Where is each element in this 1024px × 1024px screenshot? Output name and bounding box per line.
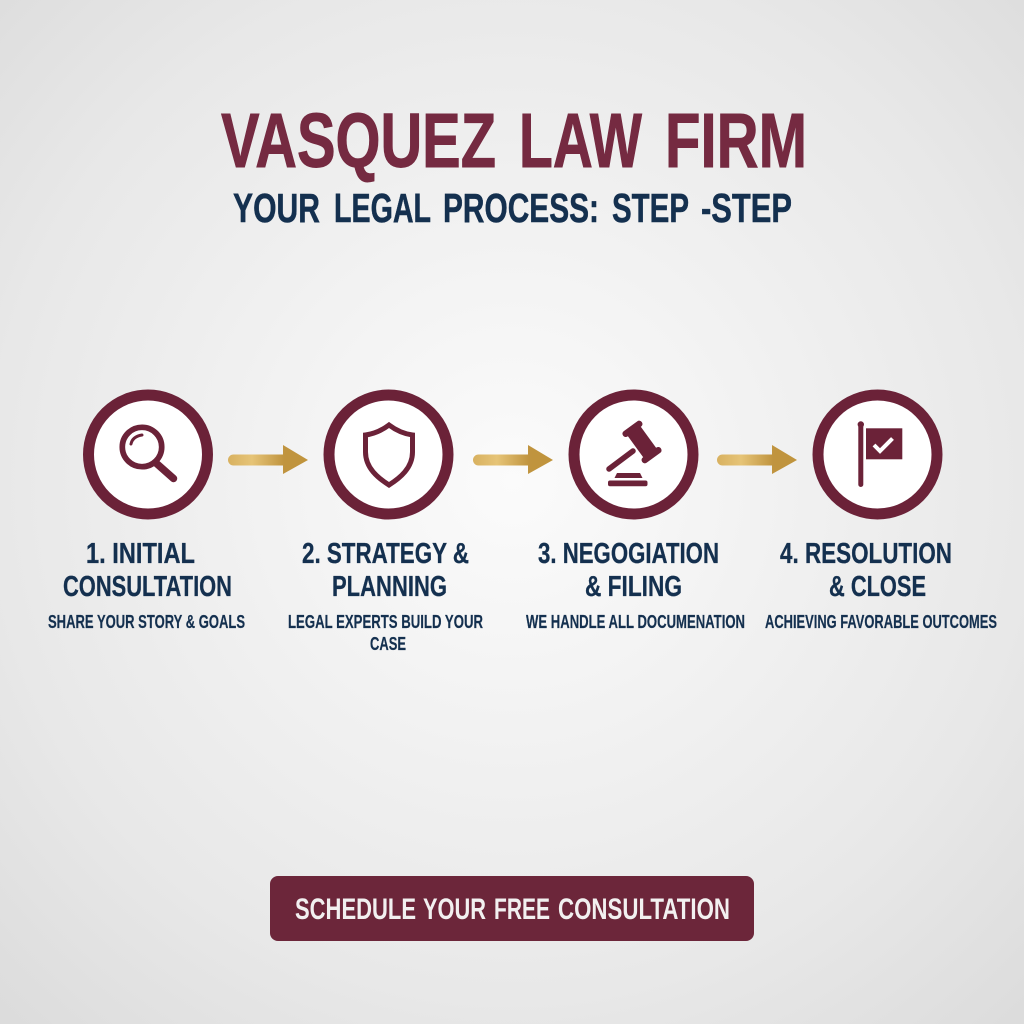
step 4 heading: [780, 538, 952, 603]
step 4 heading: 4. RESOLUTION: [780, 538, 952, 570]
subtitle: YOUR: [233, 185, 320, 231]
icon: gavel in ring: [574, 395, 693, 514]
step 1 heading: CONSULTATION: [63, 571, 232, 603]
step 2 description: LEGAL EXPERTS BUILD YOUR: [288, 611, 483, 632]
arrow 2 to 3: [473, 445, 553, 474]
icon: flag with check in ring: [818, 395, 937, 514]
subtitle: -STEP: [701, 185, 792, 231]
step 1 heading: [63, 538, 232, 603]
step 4: resolution and close: [765, 395, 997, 632]
title: LAW: [519, 98, 642, 184]
step 2 description: CASE: [370, 633, 406, 654]
call-to-action button: FREE: [494, 893, 550, 926]
step 2 description: [288, 611, 483, 654]
call-to-action button: SCHEDULE: [295, 893, 416, 926]
step 3 heading: & FILING: [585, 571, 682, 603]
arrow 1 to 2: [228, 445, 308, 474]
step 3 heading: [538, 538, 719, 603]
step 1 description: SHARE YOUR STORY & GOALS: [48, 611, 245, 632]
step 4 heading: & CLOSE: [829, 571, 926, 603]
subtitle: PROCESS:: [443, 185, 599, 231]
title: FIRM: [665, 98, 807, 184]
step 3 description: WE HANDLE ALL DOCUMENATION: [526, 611, 745, 632]
step 1 heading: 1. INITIAL: [86, 538, 195, 570]
title: [221, 98, 807, 184]
icon: magnifying glass in ring: [88, 395, 208, 514]
step 2: strategy and planning: [288, 395, 483, 654]
step 2 heading: [302, 538, 469, 603]
icon: shield in ring: [329, 395, 448, 514]
subtitle: LEGAL: [334, 185, 431, 231]
title: VASQUEZ: [221, 98, 496, 184]
step 2 heading: PLANNING: [332, 571, 447, 603]
call-to-action button: CONSULTATION: [558, 893, 730, 926]
step 1: initial consultation: [48, 395, 245, 632]
step 2 heading: 2. STRATEGY &: [302, 538, 469, 570]
arrow 3 to 4: [717, 445, 797, 474]
step 3: negotiation and filing: [526, 395, 745, 632]
subtitle: [233, 185, 792, 231]
subtitle: STEP: [612, 185, 689, 231]
step 3 heading: 3. NEGOGIATION: [538, 538, 719, 570]
call-to-action button: YOUR: [423, 893, 486, 926]
call-to-action button: [270, 876, 754, 941]
